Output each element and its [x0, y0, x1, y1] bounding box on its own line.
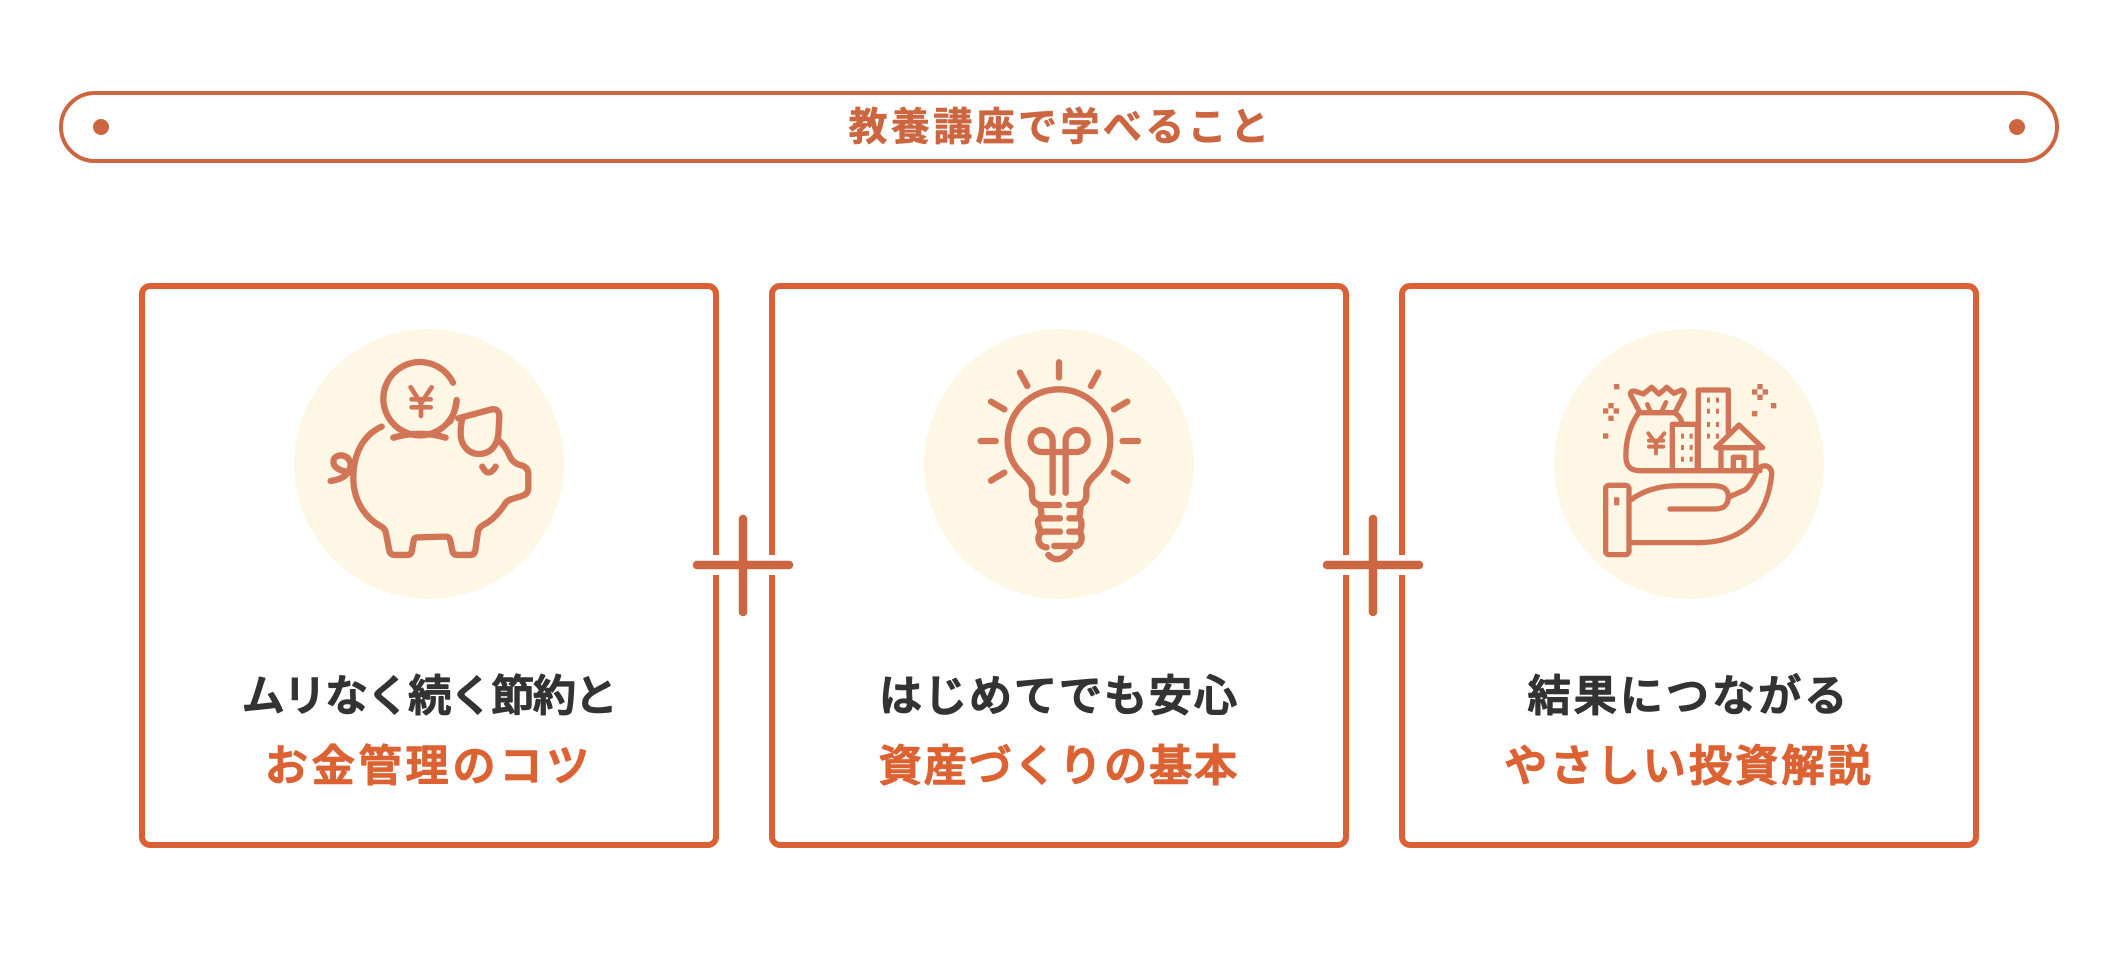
icon circle 1 [294, 329, 564, 599]
plus connector 1 [697, 519, 789, 612]
icon circle 3 [1554, 329, 1824, 599]
card 1 line 1: ムリなく続く節約と [242, 673, 616, 721]
panel: asset building basics [772, 286, 1346, 845]
card 3 line 2: やさしい投資解説 [1504, 743, 1874, 791]
banner left dot [93, 119, 109, 135]
banner right dot [2009, 119, 2025, 135]
title banner [61, 93, 2057, 161]
card 3 text [1504, 673, 1874, 791]
icon: piggy bank with yen coin [331, 362, 528, 555]
plus connector 2 [1327, 519, 1419, 612]
icon: hand holding money bag, buildings and house [1603, 384, 1776, 555]
decorative building windows and sparkles [1603, 384, 1776, 505]
card 3 line 1: 結果につながる [1528, 673, 1850, 721]
panel: gentle investment explanations [1402, 286, 1976, 845]
card 1 text [242, 673, 616, 791]
card 2 line 2: 資産づくりの基本 [879, 743, 1239, 791]
banner pill outline [61, 93, 2057, 161]
panel: saving and money management [142, 286, 716, 845]
card 1 line 2: お金管理のコツ [265, 743, 593, 791]
card 2 frame [772, 286, 1346, 845]
icon: light bulb [981, 362, 1138, 559]
icon circle 2 [924, 329, 1194, 599]
card 1 frame [142, 286, 716, 845]
card 3 frame [1402, 286, 1976, 845]
banner heading: 教養講座で学べること [848, 106, 1273, 150]
card 2 line 1: はじめてでも安心 [879, 673, 1239, 721]
card 2 text [879, 673, 1239, 791]
